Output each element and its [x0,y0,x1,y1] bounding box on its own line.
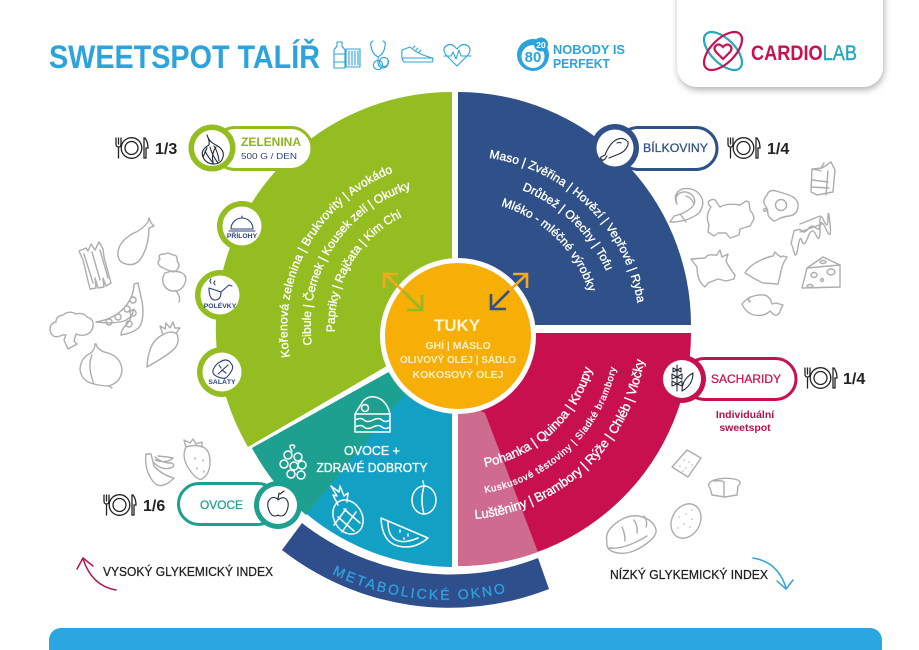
text: metabolické okno: METABOLICKÉ OKNO [332,566,504,600]
arrow: green fat exchange [384,274,422,310]
icon: radish [158,253,186,302]
text: low glycemic index: NÍZKÝ GLYKEMICKÝ INDEX [610,567,769,582]
icon: fish [742,295,783,316]
arrow: low glycemic [753,558,793,589]
arrow: protein fat exchange [491,274,527,309]
text: saláty: SALÁTY [208,377,236,386]
icon: asparagus [79,242,111,289]
text: carbohydrate list: Luštěniny | Brambory | Rýže | Chléb | Vločky [474,358,646,520]
text: tuky heading: TUKY [434,316,481,335]
icon: grapes [280,445,306,479]
icon: heart with pulse [444,44,471,66]
icon: cracker [672,450,701,477]
text: polévky: POLÉVKY [204,301,237,310]
icon: shrimp [670,189,703,222]
carbohydrate doodles [606,450,740,553]
icon: cloche [229,216,255,231]
portion: 1/6 [104,495,165,515]
icon: baguette [606,516,656,553]
text: ovoce: OVOCE [200,498,243,512]
icon: 80/20 circle: 20 [536,40,546,50]
portion: 1/4 proteins: 1/4 [767,141,789,158]
icon: broccoli [50,312,93,349]
icon: fried egg [764,190,798,221]
text: individuální sweetspot: sweetspot [719,422,771,434]
text: nobody is perfekt: PERFEKT [553,57,610,71]
icon: bananas [146,454,174,486]
text: ovoce a dobroty: OVOCE + [344,444,400,458]
icon: watermelon slice [381,518,428,547]
badge: saláty [197,347,247,397]
text: protein list: Mléko - mléčné výrobky [502,198,596,290]
text: vegetable list: Cibule | Černek | Kousek zelí | Okurky [302,182,410,345]
footer banner [49,628,882,650]
icon: ladle [209,279,232,300]
icon: onion [202,135,223,164]
panel: tuky centre [380,258,536,414]
text: sacharidy: SACHARIDY [711,372,781,386]
vegetable doodles [50,218,210,486]
text: high glycemic index: VYSOKÝ GLYKEMICKÝ INDEX [103,564,274,579]
panel: zelenina sector [216,92,452,447]
icon: bottle and glasses [334,42,360,68]
icon: turkey chicken [745,252,787,284]
arrow: high glycemic [77,558,116,590]
text: nobody is perfekt: NOBODY IS [553,43,625,57]
text: fat list: KOKOSOVÝ OLEJ [412,368,504,381]
text: bílkoviny: BÍLKOVINY [643,140,708,155]
icon: potato [665,499,707,543]
text: fat list: OLIVOVÝ OLEJ | SÁDLO [400,353,516,366]
icon: plum [412,481,436,514]
logo card [677,0,883,87]
badge: nobody is perfekt [517,38,625,71]
icon: strawberry [184,439,210,479]
text: protein list: Maso | Zvěřina | Hovězí | Vepřové | Ryba [490,150,644,304]
label: sacharidy [658,355,796,403]
label: zelenina: 500 G / DEN [241,151,297,161]
text: fat list [400,339,516,381]
icon: cake [355,397,390,432]
icon: apple [268,491,288,516]
icon: 80/20 circle [517,38,549,71]
logo mark [698,26,748,76]
icon: piggy bank [707,199,754,238]
icon: eggplant [118,218,154,265]
icon: carrot [147,322,180,367]
icon: wheat [672,365,693,391]
text: fat list: GHÍ | MÁSLO [425,339,491,352]
icon: lettuce [213,360,233,378]
panel: sacharidy sector [458,333,691,566]
text: vegetable list: Kořenová zelenina | Brukvovitý | Avokádo [278,167,392,358]
text: individuální sweetspot: Individuální [716,409,775,421]
portion: 1/3: 1/3 [155,141,177,158]
icon: cheese [802,257,840,288]
text: vegetable list: Papriky | Rajčata | Kim Chi [326,209,402,332]
portion: 1/3 [116,138,177,158]
badge: polévky [195,270,245,320]
text: protein list: Drůbež | Ořechy | Tofu [522,182,612,271]
text: zelenina: ZELENINA [241,137,301,149]
text: carbohydrate list: Kuskusové těstoviny | Sladké brambory [484,366,618,493]
icon: chicken leg [600,138,628,161]
icon: bacon [791,213,830,255]
text: přílohy: PŘÍLOHY [227,231,258,240]
text: ovoce a dobroty: ZDRAVÉ DOBROTY [316,460,428,475]
title: SWEETSPOT TALÍŘ [49,39,320,75]
icon: bread slice [709,478,740,497]
icons: lifestyle row [334,41,471,70]
label: ovoce [178,481,302,529]
panel: bílkoviny sector [458,92,691,325]
icon: running shoe [402,46,433,62]
text: ovoce a dobroty [316,444,428,475]
icon: peas [96,283,143,335]
icon: pineapple [327,486,369,540]
icon: milk carton [811,162,835,195]
protein doodles [670,162,840,316]
portion: 1/4 carbohydrates: 1/4 [843,371,865,388]
icon: 80/20 circle: 80 [525,49,541,66]
portion: 1/6: 1/6 [143,498,165,515]
portion: 1/4 proteins [728,138,789,158]
panel: ovoce sector [252,337,452,567]
label: zelenina [188,124,312,172]
icon: cow [691,250,735,287]
icon: garlic [80,344,122,388]
text: carbohydrate list: Pohanka | Quinoa | Kroupy [484,366,594,468]
portion: 1/4 carbohydrates [805,368,865,388]
label: bílkoviny [591,124,717,172]
logo text: CARDIOLAB [751,42,857,65]
icon: stethoscope [371,41,389,70]
badge: přílohy [217,201,267,251]
panel: metabolic window band [282,523,549,608]
